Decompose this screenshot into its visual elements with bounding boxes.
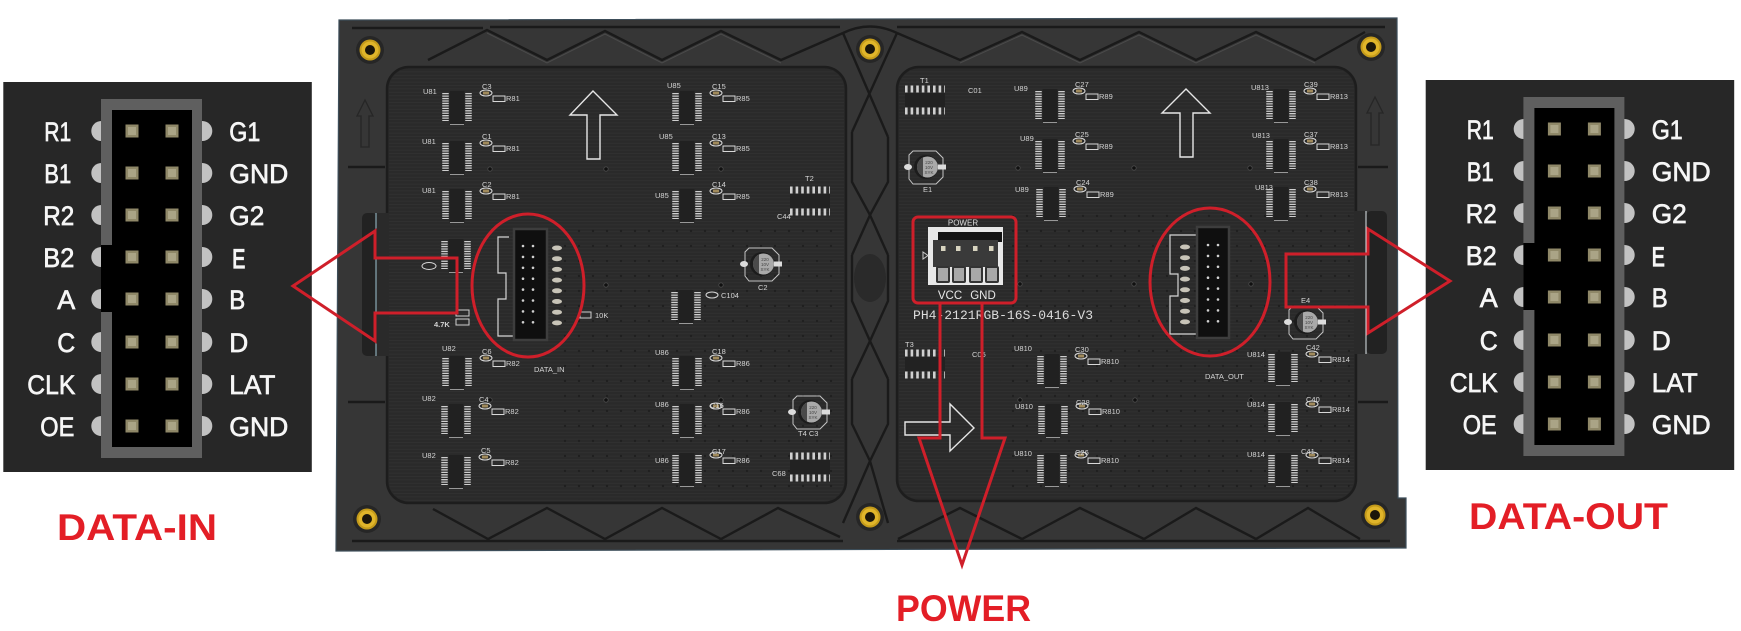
left board driver chips: U81: [422, 137, 436, 146]
left board driver chips: U85: [667, 81, 681, 90]
logic chips: C01: [968, 86, 982, 95]
left board driver chips: R81: [506, 192, 520, 201]
right board driver chips: C37: [1304, 130, 1318, 139]
right board driver chips: R89: [1099, 142, 1113, 151]
panel: data-out pinout: C: [1480, 326, 1498, 356]
heading: POWER: POWER: [896, 588, 1031, 629]
left board driver chips: C104: [721, 291, 739, 300]
panel: data-out pinout: OE: [1463, 410, 1497, 440]
left board driver chips: U81: [422, 186, 436, 195]
right board driver chips: U814: [1247, 450, 1265, 459]
capacitors: T4 C3: [798, 429, 818, 438]
logic chips: T1: [920, 76, 929, 85]
power connector: [923, 218, 1003, 302]
right board driver chips: C42: [1306, 343, 1320, 352]
left board driver chips: R82: [505, 407, 519, 416]
left board driver chips: C5: [481, 446, 491, 455]
small board labels: DATA_IN: [534, 365, 565, 374]
side notches: [362, 211, 1387, 356]
panel: data-in pinout: A: [57, 285, 75, 315]
left board driver chips: C13: [712, 132, 726, 141]
panel: data-in pinout: D: [229, 328, 248, 358]
left board driver chips: U82: [442, 344, 456, 353]
panel: data-in pinout: LAT: [229, 370, 275, 400]
right board driver chips: U813: [1252, 131, 1270, 140]
heading: DATA-OUT: DATA-OUT: [1469, 496, 1668, 537]
right board driver chips: R89: [1100, 190, 1114, 199]
left board driver chips: C15: [712, 82, 726, 91]
right board driver chips: [1014, 80, 1350, 486]
panel: data-in pinout: GND: [229, 412, 288, 442]
logic chips: C68: [772, 469, 786, 478]
panel: data-out pinout: [1426, 80, 1734, 470]
panel: data-in pinout: [3, 82, 312, 472]
left board driver chips: C14: [712, 180, 726, 189]
center post: [854, 254, 886, 302]
panel: data-out pinout: D: [1652, 326, 1671, 356]
right board driver chips: C24: [1076, 178, 1090, 187]
left board driver chips: U81: [423, 87, 437, 96]
left board driver chips: U82: [422, 451, 436, 460]
callout: power red outline: [913, 217, 1016, 565]
panel: data-in pinout: R1: [44, 117, 71, 147]
capacitors: C2: [758, 283, 768, 292]
panel: data-in pinout: E: [232, 244, 245, 274]
logic chips: T2: [805, 174, 814, 183]
left board driver chips: R85: [736, 192, 750, 201]
right board driver chips: U89: [1014, 84, 1028, 93]
white direction arrows: [570, 89, 1210, 451]
panel: data-in pinout: B2: [43, 243, 74, 273]
screw holes: [353, 33, 1389, 533]
right board driver chips: C40: [1306, 395, 1320, 404]
left board driver chips: U86: [655, 400, 669, 409]
logic chips: C05: [972, 350, 986, 359]
panel: data-in pinout: OE: [40, 412, 74, 442]
left board driver chips: R82: [505, 458, 519, 467]
panel: data-out pinout: B1: [1467, 157, 1494, 187]
panel: data-in pinout: B: [229, 285, 245, 315]
right data connector: [1170, 227, 1229, 338]
right board driver chips: U89: [1020, 134, 1034, 143]
right board driver chips: R89: [1099, 92, 1113, 101]
panel: data-out pinout: R1: [1467, 115, 1494, 145]
small board labels: 10K: [595, 311, 608, 320]
right board driver chips: R814: [1332, 456, 1350, 465]
panel: data-in pinout: GND: [229, 159, 288, 189]
part number: PH4-2121RGB-16S-0416-V3: [913, 308, 1093, 323]
left board driver chips: C6: [482, 347, 492, 356]
panel: data-out pinout: LAT: [1652, 368, 1698, 398]
panel: data-out pinout: B: [1652, 283, 1668, 313]
power connector: VCC: [938, 290, 962, 302]
small board labels: 4.7K: [434, 320, 450, 329]
panel: data-in pinout: CLK: [27, 370, 75, 400]
panel: data-out pinout: GND: [1652, 157, 1711, 187]
right board driver chips: R814: [1332, 355, 1350, 364]
right board driver chips: C26: [1075, 448, 1089, 457]
left board driver chips: R81: [506, 94, 520, 103]
panel: data-in pinout: R2: [43, 201, 74, 231]
left board driver chips: C1: [482, 132, 492, 141]
board frame: [336, 18, 1406, 551]
panel: data-in pinout: G2: [229, 201, 264, 231]
panel: data-out pinout: G2: [1652, 199, 1687, 229]
right board driver chips: C39: [1304, 80, 1318, 89]
capacitors: E4: [1301, 296, 1310, 305]
panel: data-out pinout: E: [1652, 242, 1665, 272]
panel: data-out pinout: GND: [1652, 410, 1711, 440]
left board driver chips: R86: [736, 456, 750, 465]
right board driver chips: R810: [1102, 407, 1120, 416]
panel: data-out pinout: B2: [1466, 241, 1497, 271]
left board driver chips: [422, 81, 750, 488]
left board driver chips: U86: [655, 456, 669, 465]
left board driver chips: C4: [479, 395, 489, 404]
right board driver chips: U810: [1015, 402, 1033, 411]
callout: data-in red outline: [293, 214, 584, 357]
capacitors: [740, 151, 1326, 438]
right board driver chips: C28: [1076, 398, 1090, 407]
frame lattice: [348, 26, 1390, 541]
panel: data-out pinout: G1: [1652, 115, 1683, 145]
panel: data-in pinout: G1: [229, 117, 260, 147]
via holes: [488, 166, 1253, 402]
left board driver chips: U85: [655, 191, 669, 200]
left board driver chips: R82: [506, 359, 520, 368]
small board labels: DATA_OUT: [1205, 372, 1244, 381]
left board driver chips: C2: [482, 180, 492, 189]
right board driver chips: R810: [1101, 456, 1119, 465]
left data connector: [498, 229, 562, 340]
PCB left: [376, 67, 846, 503]
logic chips: [772, 76, 986, 478]
right board driver chips: C25: [1075, 130, 1089, 139]
left board driver chips: R86: [736, 359, 750, 368]
right board driver chips: U814: [1247, 400, 1265, 409]
right board driver chips: U810: [1014, 449, 1032, 458]
capacitors: E1: [923, 185, 932, 194]
panel: data-in pinout: B1: [44, 159, 71, 189]
right board driver chips: U813: [1251, 83, 1269, 92]
panel: data-out pinout: CLK: [1450, 368, 1498, 398]
right board driver chips: C30: [1075, 345, 1089, 354]
right board driver chips: C41: [1301, 447, 1315, 456]
left board driver chips: R85: [736, 144, 750, 153]
left board driver chips: U82: [422, 394, 436, 403]
power connector: POWER: [948, 218, 978, 228]
right board driver chips: R810: [1101, 357, 1119, 366]
small board labels: [422, 262, 1244, 381]
right board driver chips: R814: [1332, 405, 1350, 414]
left board driver chips: R85: [736, 94, 750, 103]
power connector: GND: [970, 290, 996, 302]
right board driver chips: U89: [1015, 185, 1029, 194]
right board driver chips: C38: [1304, 178, 1318, 187]
panel: data-in pinout: C: [57, 328, 75, 358]
heading: DATA-IN: DATA-IN: [57, 507, 217, 548]
left board driver chips: C17: [712, 447, 726, 456]
left board driver chips: C18: [712, 347, 726, 356]
right board driver chips: U813: [1255, 183, 1273, 192]
left board driver chips: C3: [482, 82, 492, 91]
left board driver chips: R86: [736, 407, 750, 416]
right board driver chips: U814: [1247, 350, 1265, 359]
panel: data-out pinout: R2: [1466, 199, 1497, 229]
panel: LED module board: [336, 18, 1406, 551]
right board driver chips: U810: [1014, 344, 1032, 353]
logic chips: C44: [777, 212, 791, 221]
callout: data-out red outline: [1150, 208, 1450, 356]
left board driver chips: U85: [659, 132, 673, 141]
right board driver chips: R813: [1330, 92, 1348, 101]
right board driver chips: R813: [1330, 190, 1348, 199]
embossed frame arrows: [357, 97, 1383, 147]
right board driver chips: C27: [1075, 80, 1089, 89]
panel: data-out pinout: A: [1480, 283, 1498, 313]
right board driver chips: R813: [1330, 142, 1348, 151]
left board driver chips: U86: [655, 348, 669, 357]
logic chips: T3: [905, 340, 914, 349]
left board driver chips: R81: [506, 144, 520, 153]
left board driver chips: C16: [710, 401, 724, 410]
PCB right: [897, 67, 1366, 501]
